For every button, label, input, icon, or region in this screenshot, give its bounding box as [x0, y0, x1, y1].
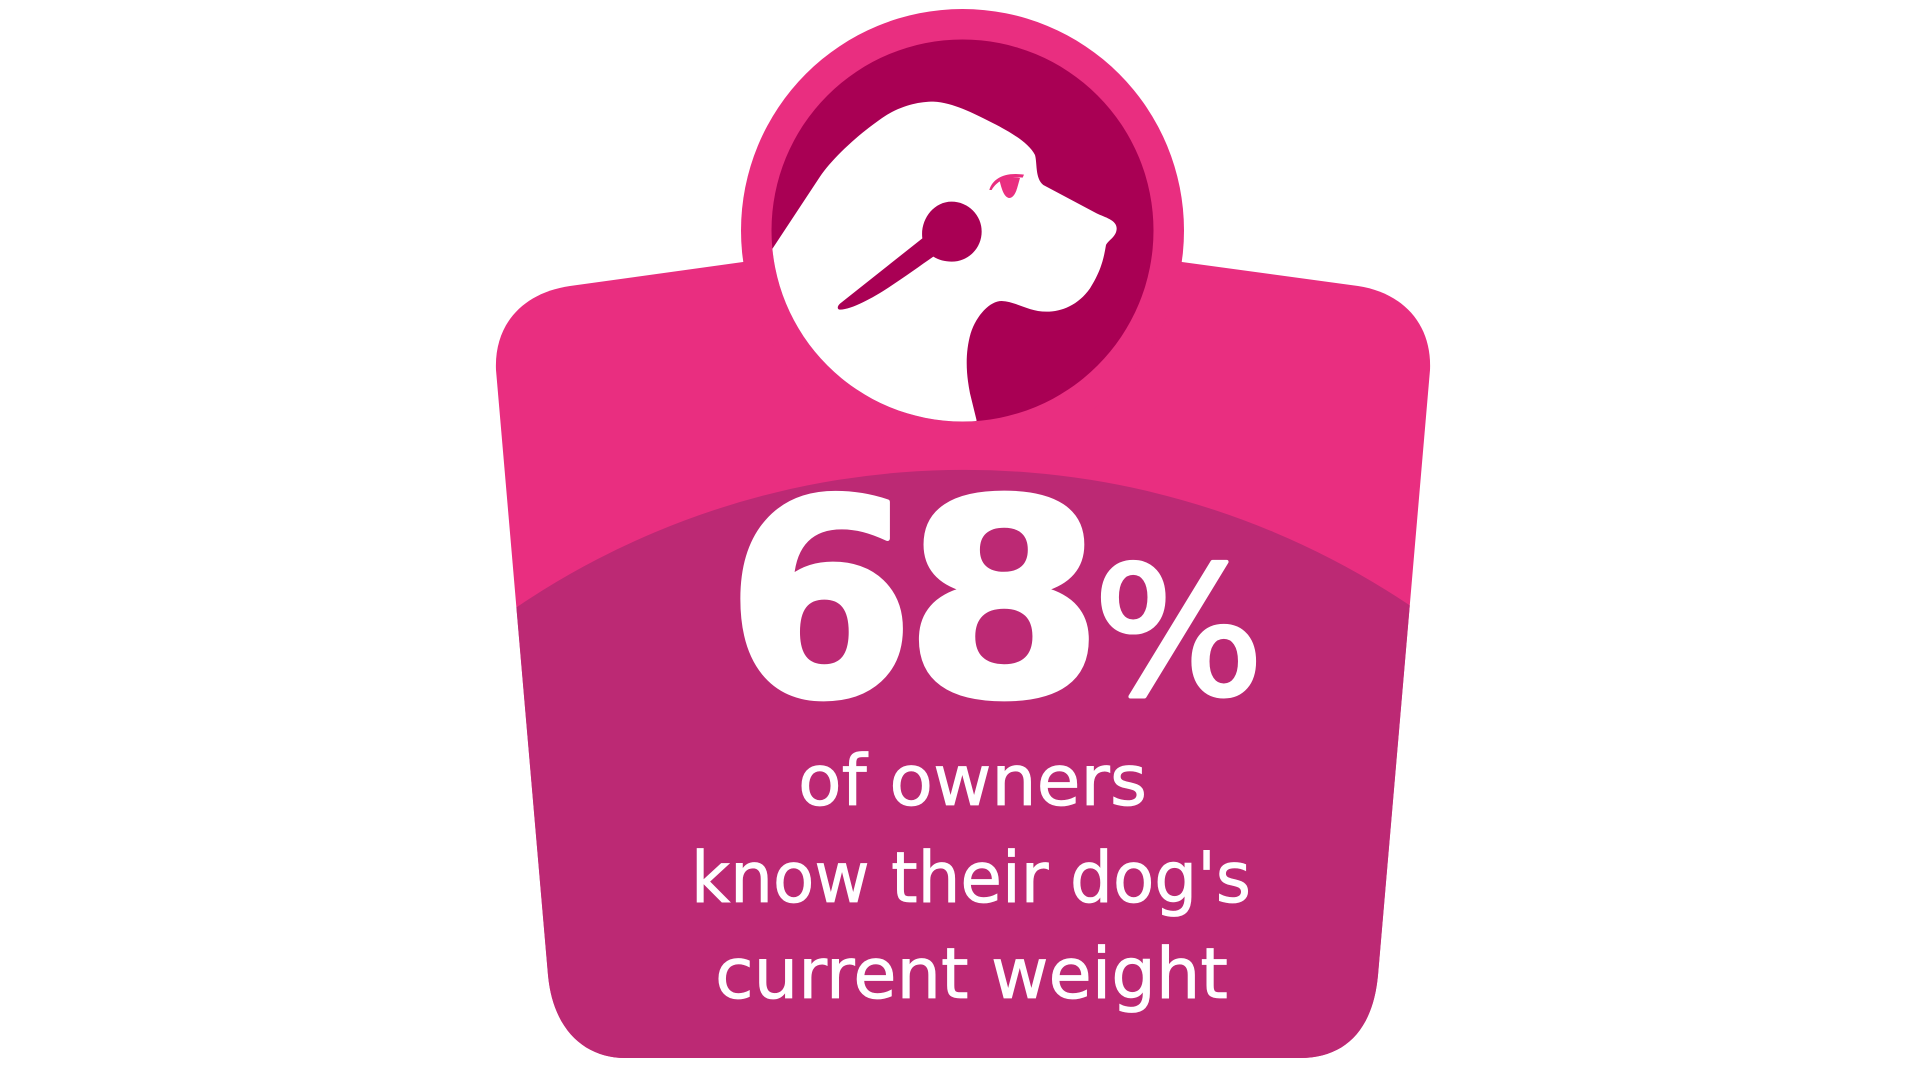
dial outer ring [741, 9, 1184, 452]
percent sign: % [1093, 529, 1264, 736]
infographic: dog weight scale [496, 9, 1430, 1058]
caption text: know their dog's [691, 837, 1251, 919]
number 68: 6 [726, 444, 915, 760]
scale lower panel [490, 470, 1439, 1060]
caption text: of owners [798, 740, 1147, 822]
scale upper panel [496, 262, 1430, 1058]
scale body [490, 262, 1439, 1060]
scale needle [838, 202, 982, 310]
dog silhouette [750, 102, 1117, 433]
number 68: 8 [904, 444, 1104, 760]
statistic: 68 percent [726, 444, 1264, 760]
caption text: current weight [715, 933, 1228, 1015]
icon: dog head with needle [750, 102, 1117, 433]
dog eye [989, 174, 1024, 198]
number 68 [726, 444, 1104, 760]
caption text [691, 740, 1251, 1015]
dial inner circle [772, 40, 1154, 422]
